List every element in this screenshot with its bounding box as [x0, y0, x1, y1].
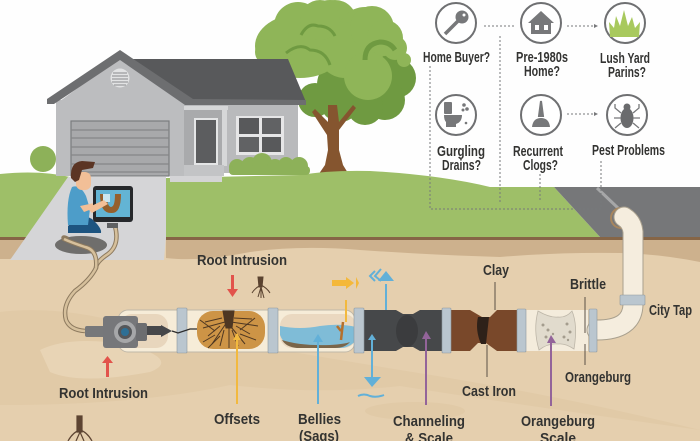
checklist labels [423, 49, 665, 174]
inspection camera [85, 316, 197, 348]
bush [30, 146, 56, 172]
water in belly section [280, 322, 356, 348]
technician with tablet [68, 161, 133, 233]
pipe labels: Root Intrusion [197, 252, 287, 269]
pipe labels: Bellies [298, 411, 341, 428]
clamps [177, 295, 645, 353]
pipe labels: Offsets [214, 411, 260, 428]
small root icons [68, 277, 270, 441]
red arrows [102, 275, 238, 377]
house [47, 50, 306, 182]
root mass [197, 311, 265, 349]
checklist labels: Pest Problems [592, 142, 665, 159]
icon: grass [605, 3, 645, 43]
clear pipe section [118, 310, 356, 352]
purple arrows [422, 331, 556, 406]
pipe labels: Clay [483, 262, 510, 279]
orangeburg pipe [526, 310, 588, 351]
pipe labels: Cast Iron [462, 383, 516, 400]
icon: house [521, 3, 561, 43]
manhole and cable [55, 226, 116, 331]
pipe assembly [118, 208, 645, 353]
checklist labels: Clogs? [523, 157, 558, 174]
pipe labels [59, 252, 692, 441]
checklist labels: Recurrent [513, 143, 563, 160]
icon: bug [607, 95, 647, 135]
checklist labels: Home? [524, 63, 560, 80]
icon: plunger [521, 95, 561, 135]
cast iron pipe [450, 310, 518, 351]
yellow arrows [233, 277, 359, 404]
checklist labels: Gurgling [437, 143, 485, 160]
elbow to city tap [611, 208, 631, 228]
callout lines [487, 282, 585, 377]
icon: key [436, 3, 476, 43]
checklist labels: Lush Yard [600, 50, 650, 67]
checklist labels: Home Buyer? [423, 49, 490, 66]
dotted connectors [430, 26, 601, 209]
tree [255, 0, 416, 178]
pipe labels: Brittle [570, 276, 606, 293]
checklist labels: Parins? [608, 64, 646, 81]
pipe labels: Channeling [393, 413, 465, 430]
blue arrows [313, 269, 394, 404]
icon: toilet [436, 95, 476, 135]
soil [0, 237, 700, 441]
tablet [93, 186, 133, 222]
lawn and road [0, 171, 700, 237]
driveway [10, 177, 166, 260]
shrubs [229, 153, 310, 175]
checklist labels: Pre-1980s [516, 49, 568, 66]
pipe labels: Orangeburg [521, 413, 595, 430]
pipe labels: Orangeburg [565, 369, 631, 386]
checklist labels: Drains? [442, 157, 481, 174]
pipe labels: Root Intrusion [59, 385, 148, 402]
black channeled pipe [363, 310, 442, 351]
